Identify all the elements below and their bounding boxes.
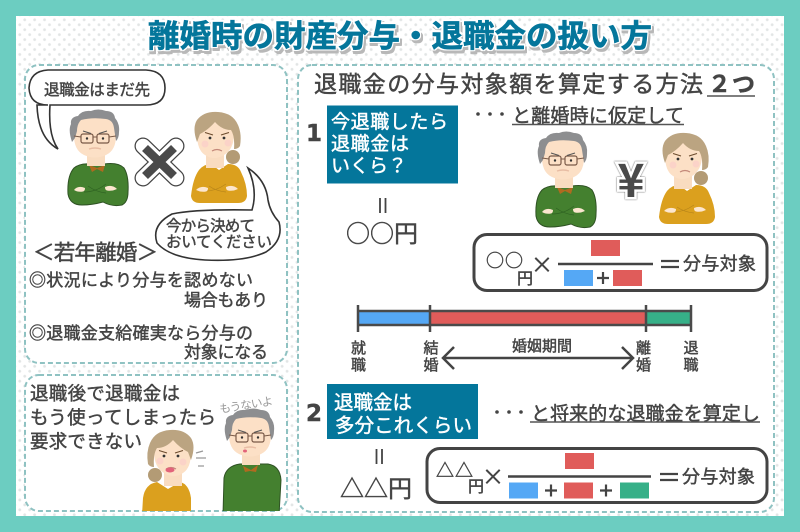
panel: calculation methods [298, 65, 774, 512]
box: method 1: 今退職したら [331, 107, 448, 134]
timeline labels [351, 337, 699, 375]
formula 1: × [531, 248, 553, 280]
formula 2: × [482, 460, 504, 492]
text: assume divorce: と離婚時に仮定して [512, 101, 684, 128]
box: method 2: 退職金は [334, 386, 412, 415]
speech bubble: man [29, 70, 165, 149]
caption: man says: もうないよ [218, 393, 274, 417]
heading: two methods: ２つ [708, 65, 755, 99]
timeline labels: 婚 [636, 354, 651, 375]
box: method 2 [327, 384, 478, 439]
icon: speech lines [196, 451, 206, 466]
panel: young divorce [25, 65, 287, 363]
arrow: marriage period: 婚姻期間 [512, 335, 572, 356]
amount 2: △△円 [340, 469, 412, 504]
icon: man replying [223, 408, 281, 515]
box: method 2: 多分これくらい [335, 409, 472, 438]
text: after retirement note: 要求できない [30, 428, 142, 454]
title: 離婚時の財産分与・退職金の扱い方 [148, 11, 652, 56]
timeline labels: 結 [423, 337, 439, 358]
icon: yen mark: ¥ [617, 145, 645, 211]
formula 1 [474, 234, 767, 290]
icon: man [536, 132, 596, 228]
formula 2: 円 [468, 473, 484, 497]
timeline labels: 婚 [423, 354, 439, 375]
panel: after retirement [25, 375, 287, 515]
timeline labels: 退 [683, 337, 699, 358]
text: note 1: 場合もあり [184, 286, 268, 311]
heading: two methods: 退職金の分与対象額を算定する方法 [314, 65, 703, 99]
timeline labels: 就 [351, 337, 366, 358]
timeline labels: 職 [351, 354, 366, 375]
formula 1: 分与対象 [683, 250, 756, 276]
text: after retirement note [30, 380, 216, 454]
text: note 2: 対象になる [184, 338, 268, 363]
formula 2 [427, 448, 767, 502]
timeline bar [358, 305, 691, 332]
formula 1: 円 [517, 265, 533, 289]
number 2: 2 [306, 401, 322, 427]
icon: woman speaking [142, 430, 194, 515]
formula 2: 分与対象 [682, 463, 755, 489]
text: after retirement note: もう使ってしまったら [30, 404, 216, 430]
text: note 1 [29, 266, 268, 311]
timeline labels: 職 [683, 354, 699, 375]
box: method 1 [327, 106, 458, 184]
text: note 2: ◎退職金支給確実なら分与の [29, 319, 253, 344]
heading: young divorce: ＜若年離婚＞ [33, 236, 158, 267]
number 1: 1 [306, 121, 322, 147]
icon: man arms crossed [68, 110, 128, 206]
equals sign 1 [380, 198, 386, 213]
text: note 1: ◎状況により分与を認めない [29, 266, 253, 291]
formula 2: △△ [436, 457, 473, 483]
text: note 2 [29, 319, 268, 363]
speech bubble: woman: おいてください [166, 230, 272, 252]
speech bubble: woman [156, 168, 280, 260]
amount 1: ○○円 [346, 214, 418, 249]
speech bubble: woman: 今から決めて [166, 214, 255, 236]
timeline labels: 離 [636, 337, 651, 358]
equals sign 2 [376, 449, 382, 464]
icon: woman arms crossed [191, 112, 247, 203]
formula 1: ○○ [486, 247, 523, 273]
icon: cross mark [143, 146, 176, 178]
text: estimate future: と将来的な退職金を算定し [531, 399, 760, 426]
speech bubble: man: 退職金はまだ先 [44, 78, 150, 100]
text: after retirement note: 退職後で退職金は [30, 380, 180, 406]
box: method 1: 退職金は [331, 129, 409, 156]
icon: woman [659, 133, 715, 224]
box: method 1: いくら？ [331, 151, 407, 178]
arrow: marriage period [443, 335, 633, 369]
